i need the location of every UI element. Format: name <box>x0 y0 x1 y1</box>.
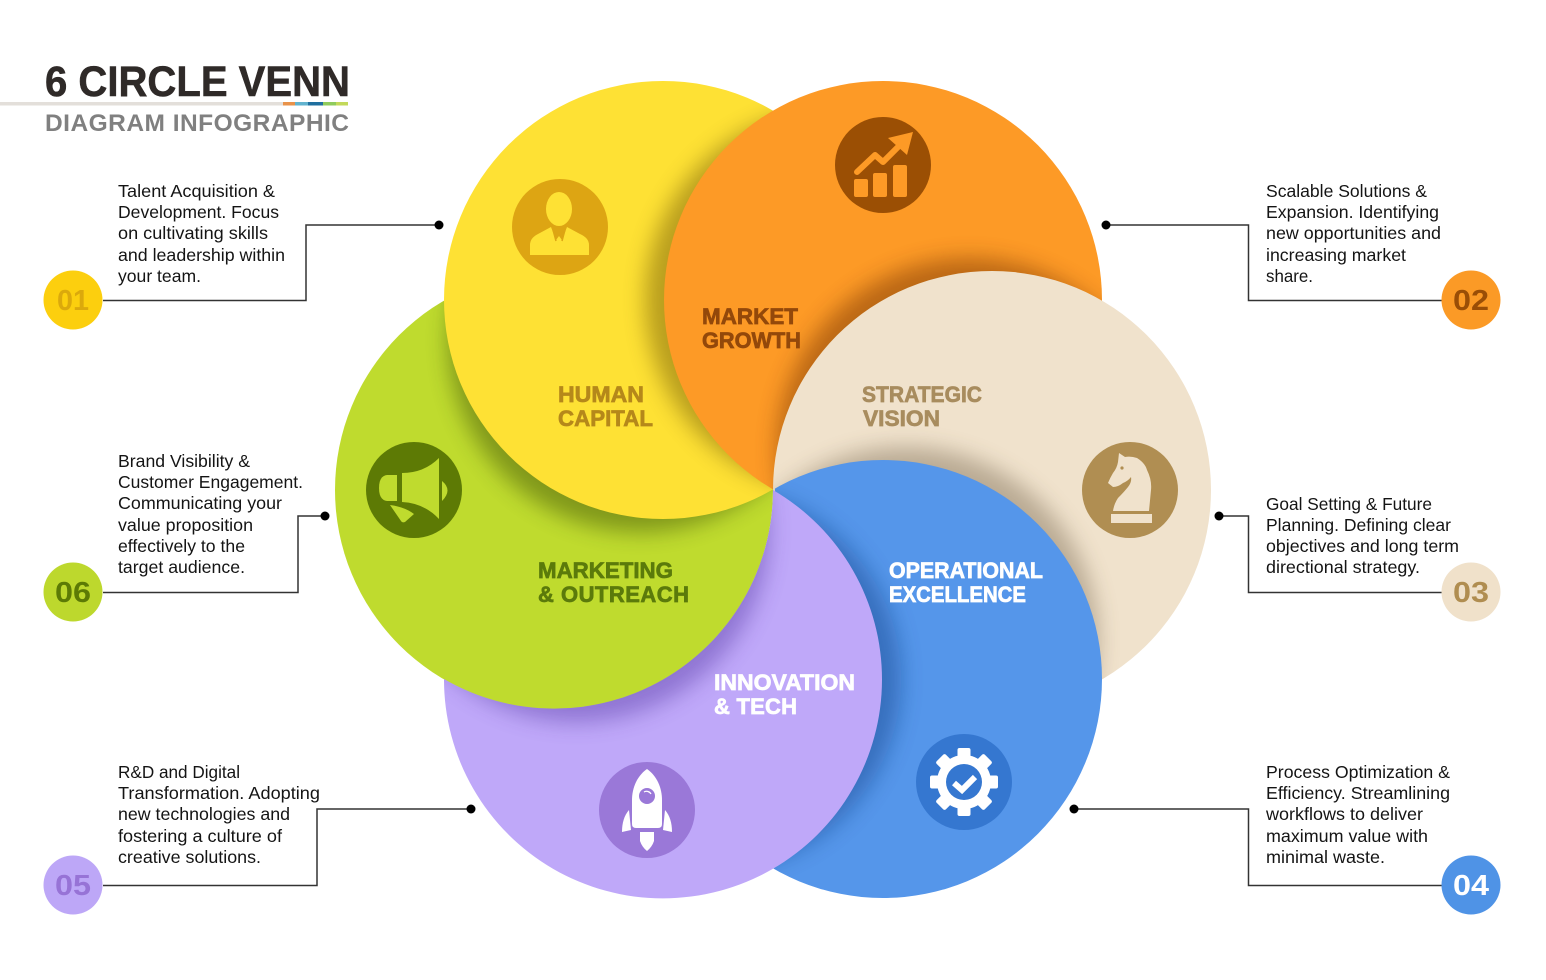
text 02: share. <box>1266 266 1313 286</box>
text 01: Talent Acquisition & <box>118 181 275 201</box>
label: strategic vision: VISION <box>863 406 940 431</box>
text 04: maximum value with <box>1266 826 1428 846</box>
text 06: Brand Visibility & <box>118 451 250 471</box>
text 01: your team. <box>118 266 201 286</box>
text 01: Development. Focus <box>118 202 279 222</box>
text 05: Transformation. Adopting <box>118 783 320 803</box>
text 05: new technologies and <box>118 804 290 824</box>
badge 06: 06 <box>55 577 91 609</box>
badge 03: 03 <box>1453 577 1489 609</box>
circle: strategic vision (beige) <box>773 271 1211 709</box>
label: market growth: MARKET <box>702 304 799 329</box>
badge 03 <box>1442 562 1500 622</box>
text 06: effectively to the <box>118 536 245 556</box>
icon: megaphone <box>366 442 462 538</box>
text 02 <box>1266 181 1441 286</box>
circle: innovation and tech (purple) <box>444 490 882 898</box>
icon: businessman <box>512 179 608 275</box>
label: marketing and outreach: & OUTREACH <box>538 582 689 607</box>
badge 01 <box>44 270 102 330</box>
text 06: value proposition <box>118 515 253 535</box>
connector 04 <box>1070 804 1442 886</box>
label: innovation and tech <box>714 670 855 719</box>
text 03: directional strategy. <box>1266 557 1420 577</box>
label: human capital: HUMAN <box>558 382 644 407</box>
text 03 <box>1266 494 1459 577</box>
circle labels <box>538 304 1043 719</box>
text 06: Communicating your <box>118 493 282 513</box>
label: operational excellence: OPERATIONAL <box>889 558 1043 583</box>
text 06: Customer Engagement. <box>118 472 303 492</box>
badge 05: 05 <box>55 870 91 902</box>
text 05: R&D and Digital <box>118 762 240 782</box>
text 04: workflows to deliver <box>1265 804 1423 824</box>
text 02: Expansion. Identifying <box>1266 202 1439 222</box>
icon: rocket <box>599 762 695 858</box>
label: innovation and tech: & TECH <box>714 694 797 719</box>
circle: human capital (yellow) <box>444 81 882 519</box>
callout 06 <box>44 451 330 622</box>
callout 05 <box>44 762 476 914</box>
badge 01: 01 <box>57 285 89 317</box>
badge 04: 04 <box>1453 870 1489 902</box>
title rule <box>0 102 348 106</box>
icon: knight <box>1082 442 1178 538</box>
text 06 <box>118 451 303 577</box>
connector 03 <box>1214 512 1442 592</box>
connector 06 <box>103 512 330 592</box>
text 05: creative solutions. <box>118 847 261 867</box>
text 05: fostering a culture of <box>118 826 282 846</box>
connector 01 <box>103 220 444 300</box>
callout 04 <box>1070 762 1500 914</box>
label: strategic vision <box>862 382 982 431</box>
label: operational excellence: EXCELLENCE <box>889 582 1026 607</box>
label: human capital: CAPITAL <box>558 406 653 431</box>
text 04: Process Optimization & <box>1266 762 1450 782</box>
text 03: Goal Setting & Future <box>1266 494 1432 514</box>
badge 04 <box>1442 856 1500 914</box>
badge 06 <box>44 562 102 622</box>
text 01: on cultivating skills <box>118 223 268 243</box>
text 04: minimal waste. <box>1266 847 1385 867</box>
icon: gear with check <box>916 734 1012 830</box>
text 04: Efficiency. Streamlining <box>1266 783 1450 803</box>
label: strategic vision: STRATEGIC <box>862 382 982 407</box>
title block <box>0 58 350 137</box>
label: market growth: GROWTH <box>702 328 801 353</box>
title: 6 CIRCLE VENN <box>45 58 350 106</box>
text 01 <box>118 181 285 286</box>
text 06: target audience. <box>118 557 245 577</box>
label: operational excellence <box>889 558 1043 607</box>
label: market growth <box>702 304 801 353</box>
badge 02: 02 <box>1453 285 1489 317</box>
label: marketing and outreach: MARKETING <box>538 558 673 583</box>
connector 05 <box>103 804 476 886</box>
circle: marketing and outreach (green) <box>335 271 773 709</box>
callout 01 <box>44 181 444 330</box>
text 02: Scalable Solutions & <box>1266 181 1427 201</box>
text 03: Planning. Defining clear <box>1266 515 1451 535</box>
badge 05 <box>44 856 102 914</box>
subtitle: DIAGRAM INFOGRAPHIC <box>45 110 349 137</box>
label: marketing and outreach <box>538 558 689 607</box>
label: innovation and tech: INNOVATION <box>714 670 855 695</box>
circle: operational excellence (blue) <box>774 460 1102 898</box>
venn circles <box>335 81 1211 898</box>
label: human capital <box>558 382 653 431</box>
text 04 <box>1265 762 1450 867</box>
text 03: objectives and long term <box>1266 536 1459 556</box>
text 05 <box>118 762 320 867</box>
callout 02 <box>1102 181 1500 330</box>
callout 03 <box>1214 494 1500 622</box>
connector 02 <box>1102 220 1442 300</box>
text 01: and leadership within <box>118 245 285 265</box>
badge 02 <box>1442 270 1500 330</box>
text 02: new opportunities and <box>1266 223 1441 243</box>
icon: growth chart <box>835 117 931 213</box>
text 02: increasing market <box>1266 245 1406 265</box>
circle: market growth (orange) <box>664 81 1102 519</box>
